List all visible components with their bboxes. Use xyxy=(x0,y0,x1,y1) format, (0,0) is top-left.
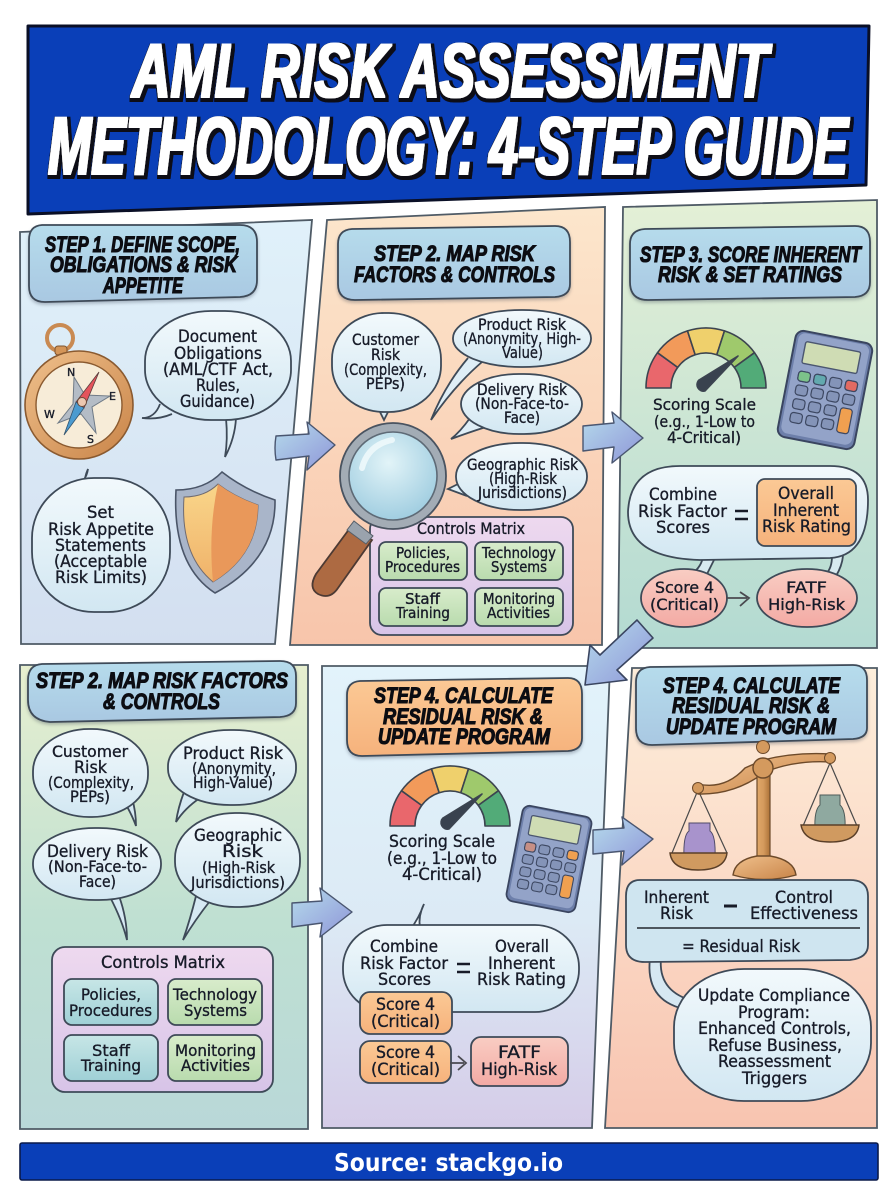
panel: step 1 define scope xyxy=(20,220,312,644)
callout: update compliance program: Program: xyxy=(738,1003,810,1023)
callout: update compliance program: Reassessment xyxy=(718,1052,831,1072)
formula: combine risk factor scores xyxy=(343,904,579,1012)
heading: step 4 orange xyxy=(347,678,582,756)
box: overall inherent risk rating: Risk Rating xyxy=(762,517,851,537)
callout: set risk appetite: Risk Limits) xyxy=(55,568,147,588)
pill: FATF high risk xyxy=(757,569,857,627)
pill: score 4 critical xyxy=(641,569,727,627)
panel: step 2 map risk factors xyxy=(290,207,605,645)
arrow: step 2 to step 3 xyxy=(583,412,643,463)
box: overall inherent risk rating: Overall xyxy=(778,484,834,504)
gauge: scoring scale xyxy=(387,766,510,885)
callout: product risk: High-Value) xyxy=(193,773,273,792)
control: monitoring xyxy=(475,588,563,626)
control: staff training: Staff xyxy=(405,590,440,608)
callout: customer risk: Customer xyxy=(352,330,419,349)
arrow: step 3 down to step 4 xyxy=(585,620,653,685)
heading: step 4 orange: RESIDUAL RISK & xyxy=(383,704,543,729)
callout: geographic risk: Geographic Risk xyxy=(467,455,579,474)
callout: delivery risk: (Non-Face-to- xyxy=(475,394,569,413)
icon: compass: S xyxy=(87,433,94,446)
arrow: step 2 repeat to step 4 xyxy=(292,888,352,937)
icon: shield xyxy=(176,472,275,593)
callout: document obligations xyxy=(142,311,291,457)
pill: score 4 critical: (Critical) xyxy=(650,595,719,614)
callout: product risk: Value) xyxy=(502,343,543,362)
box: score 4 critical second: (Critical) xyxy=(371,1060,440,1080)
icon: calculator xyxy=(776,330,874,450)
callout: set risk appetite xyxy=(32,469,170,612)
callout: product risk: (Anonymity, High- xyxy=(463,329,581,348)
heading: step 4 orange: STEP 4. CALCULATE xyxy=(374,683,554,708)
box: overall inherent risk rating: Inherent xyxy=(773,501,839,521)
footer: source bar xyxy=(20,1143,878,1180)
connector: formula to update bubble xyxy=(649,958,690,1009)
callout: customer risk: (Complexity, xyxy=(344,360,427,379)
heading: step 2 repeated: STEP 2. MAP RISK FACTORS xyxy=(36,668,288,693)
callout: geographic risk: (High-Risk xyxy=(489,469,558,488)
formula: combine risk factor scores: Risk Factor xyxy=(360,954,448,974)
heading: step 2 repeated xyxy=(28,661,296,722)
heading: step 2: FACTORS & CONTROLS xyxy=(354,262,555,287)
controls matrix xyxy=(52,947,273,1092)
control: staff training: Training xyxy=(395,604,450,622)
panel: step 4 residual risk right xyxy=(605,665,877,1128)
callout: customer risk: Customer xyxy=(52,742,128,761)
title banner xyxy=(28,26,869,214)
formula: combine risk factor scores: Combine xyxy=(649,485,717,505)
gauge: scoring scale: Scoring Scale xyxy=(389,832,495,852)
formula: combine risk factor scores: Overall xyxy=(495,937,549,957)
control: policies: Policies, xyxy=(81,985,141,1004)
callout: update compliance program: Triggers xyxy=(741,1069,807,1089)
control: monitoring: Activities xyxy=(487,604,550,622)
box: score 4 critical xyxy=(360,992,452,1034)
formula: inherent minus control: Risk xyxy=(660,904,693,924)
control: technology xyxy=(475,542,563,580)
callout: delivery risk xyxy=(33,828,161,940)
pill: FATF high risk: FATF xyxy=(786,578,827,597)
callout: geographic risk: Jurisdictions) xyxy=(190,873,285,892)
control: policies: Policies, xyxy=(396,544,450,562)
heading: step 1: OBLIGATIONS & RISK xyxy=(50,252,239,277)
gauge: scoring scale: (e.g., 1-Low to xyxy=(387,849,497,869)
callout: customer risk xyxy=(332,313,441,420)
box: FATF high risk: FATF xyxy=(498,1043,541,1063)
gauge: scoring scale: 4-Critical) xyxy=(402,865,482,885)
callout: update compliance program: Refuse Business, xyxy=(708,1036,842,1056)
callout: document obligations: Obligations xyxy=(174,344,262,364)
control: monitoring: Activities xyxy=(181,1056,250,1075)
formula: combine risk factor scores xyxy=(628,466,868,576)
callout: document obligations: Rules, xyxy=(196,376,240,396)
pill: FATF high risk: High-Risk xyxy=(768,595,846,614)
heading: step 4 blue: RESIDUAL RISK & xyxy=(672,693,830,718)
callout: customer risk xyxy=(33,729,148,826)
heading: step 3 xyxy=(630,226,870,300)
formula: inherent minus control: Control xyxy=(775,888,833,908)
gauge: scoring scale xyxy=(646,328,766,447)
callout: geographic risk: Geographic xyxy=(194,826,282,846)
callout: customer risk: PEPs) xyxy=(366,374,405,393)
control: technology: Technology xyxy=(481,544,556,562)
box: overall inherent risk rating xyxy=(757,479,856,546)
control: policies xyxy=(64,979,158,1025)
heading: step 2 repeated: & CONTROLS xyxy=(103,689,220,714)
callout: geographic risk: Risk xyxy=(222,842,263,862)
formula: combine risk factor scores: Combine xyxy=(370,937,438,957)
control: policies: Procedures xyxy=(69,1001,152,1020)
control: staff training: Staff xyxy=(92,1041,131,1060)
callout: geographic risk xyxy=(448,443,587,510)
callout: product risk: Product Risk xyxy=(478,315,567,334)
callout: product risk: Product Risk xyxy=(183,744,283,764)
controls matrix: Controls Matrix xyxy=(417,519,525,538)
callout: update compliance program: Enhanced Controls, xyxy=(698,1019,851,1039)
control: monitoring xyxy=(168,1035,262,1081)
callout: set risk appetite: (Acceptable xyxy=(54,552,147,572)
icon: balance scale xyxy=(670,740,859,880)
icon: compass xyxy=(25,325,133,459)
callout: product risk xyxy=(431,310,591,420)
callout: document obligations: Guidance) xyxy=(180,392,255,412)
gauge: scoring scale: 4-Critical) xyxy=(667,428,741,447)
arrow: score to FATF xyxy=(726,592,749,606)
callout: delivery risk: Delivery Risk xyxy=(47,842,148,862)
gauge: scoring scale: Scoring Scale xyxy=(653,395,756,414)
control: monitoring: Monitoring xyxy=(175,1041,256,1060)
formula: inherent minus control xyxy=(626,880,868,962)
control: staff training xyxy=(379,588,467,626)
heading: step 4 blue: STEP 4. CALCULATE xyxy=(663,673,841,698)
heading: step 1: STEP 1. DEFINE SCOPE, xyxy=(45,232,240,257)
panel: step 4 residual risk left xyxy=(322,666,610,1128)
formula: inherent minus control: Inherent xyxy=(644,888,709,908)
arrow: step 4 to step 4 right xyxy=(593,817,653,865)
callout: document obligations: (AML/CTF Act, xyxy=(163,360,273,380)
icon: calculator xyxy=(505,805,593,913)
box: score 4 critical second: Score 4 xyxy=(376,1043,435,1063)
callout: geographic risk: Jurisdictions) xyxy=(477,483,567,502)
callout: product risk: (Anonymity, xyxy=(192,759,276,778)
callout: set risk appetite: Statements xyxy=(55,536,146,556)
controls matrix xyxy=(370,517,573,635)
callout: customer risk: Risk xyxy=(371,345,401,364)
box: FATF high risk xyxy=(471,1037,568,1086)
callout: delivery risk: Delivery Risk xyxy=(477,380,568,399)
callout: customer risk: Risk xyxy=(74,758,107,778)
control: technology: Systems xyxy=(491,558,547,576)
heading: step 4 orange: UPDATE PROGRAM xyxy=(378,724,551,749)
heading: step 2 xyxy=(338,226,570,300)
panel: step 3 score inherent risk xyxy=(618,200,877,648)
icon: compass: W xyxy=(44,408,55,421)
callout: delivery risk xyxy=(451,374,582,439)
icon: magnifying glass xyxy=(312,423,446,596)
callout: update compliance program xyxy=(674,969,871,1101)
formula: combine risk factor scores: Risk Rating xyxy=(477,970,566,990)
callout: geographic risk: (High-Risk xyxy=(202,858,276,877)
box: FATF high risk: High-Risk xyxy=(481,1060,557,1080)
icon: compass: E xyxy=(109,390,116,403)
arrow: step 1 to step 2 xyxy=(275,422,335,470)
heading: step 1 xyxy=(29,225,257,302)
control: monitoring: Monitoring xyxy=(483,590,555,608)
gauge: scoring scale: (e.g., 1-Low to xyxy=(654,412,755,431)
formula: combine risk factor scores: Scores xyxy=(378,970,431,990)
box: score 4 critical: Score 4 xyxy=(376,995,435,1015)
icon: compass: N xyxy=(67,366,75,379)
control: staff training xyxy=(64,1035,158,1081)
heading: step 1: APPETITE xyxy=(102,273,184,298)
heading: step 2: STEP 2. MAP RISK xyxy=(374,241,537,266)
control: policies xyxy=(379,542,467,580)
formula: combine risk factor scores: Inherent xyxy=(488,954,555,974)
callout: geographic risk xyxy=(175,813,300,940)
heading: step 4 blue: UPDATE PROGRAM xyxy=(666,714,837,739)
callout: delivery risk: (Non-Face-to- xyxy=(48,857,147,876)
control: technology xyxy=(168,979,262,1025)
callout: product risk xyxy=(168,730,296,822)
footer: source bar: Source: stackgo.io xyxy=(334,1148,563,1177)
formula: inherent minus control: Effectiveness xyxy=(750,904,858,924)
pill: score 4 critical: Score 4 xyxy=(655,578,714,597)
callout: update compliance program: Update Compliance xyxy=(698,986,850,1006)
callout: customer risk: (Complexity, xyxy=(48,773,134,792)
callout: document obligations: Document xyxy=(178,327,257,347)
control: technology: Systems xyxy=(184,1001,247,1020)
heading: step 4 blue xyxy=(636,665,867,745)
callout: set risk appetite: Set xyxy=(87,503,114,523)
control: policies: Procedures xyxy=(385,558,460,576)
box: score 4 critical second xyxy=(360,1041,451,1083)
arrow: score to FATF xyxy=(450,1056,466,1070)
callout: customer risk: PEPs) xyxy=(70,787,110,806)
formula: combine risk factor scores: Scores xyxy=(656,518,710,538)
controls matrix: Controls Matrix xyxy=(101,953,225,973)
control: staff training: Training xyxy=(80,1056,141,1075)
formula: combine risk factor scores: Risk Factor xyxy=(638,502,727,522)
box: score 4 critical: (Critical) xyxy=(371,1012,440,1032)
callout: delivery risk: Face) xyxy=(79,872,116,891)
heading: step 3: RISK & SET RATINGS xyxy=(658,262,842,287)
panel: step 2 repeated xyxy=(20,661,308,1129)
control: technology: Technology xyxy=(172,985,257,1004)
formula: inherent minus control: = Residual Risk xyxy=(682,937,800,957)
callout: set risk appetite: Risk Appetite xyxy=(48,520,154,540)
callout: delivery risk: Face) xyxy=(504,408,540,427)
